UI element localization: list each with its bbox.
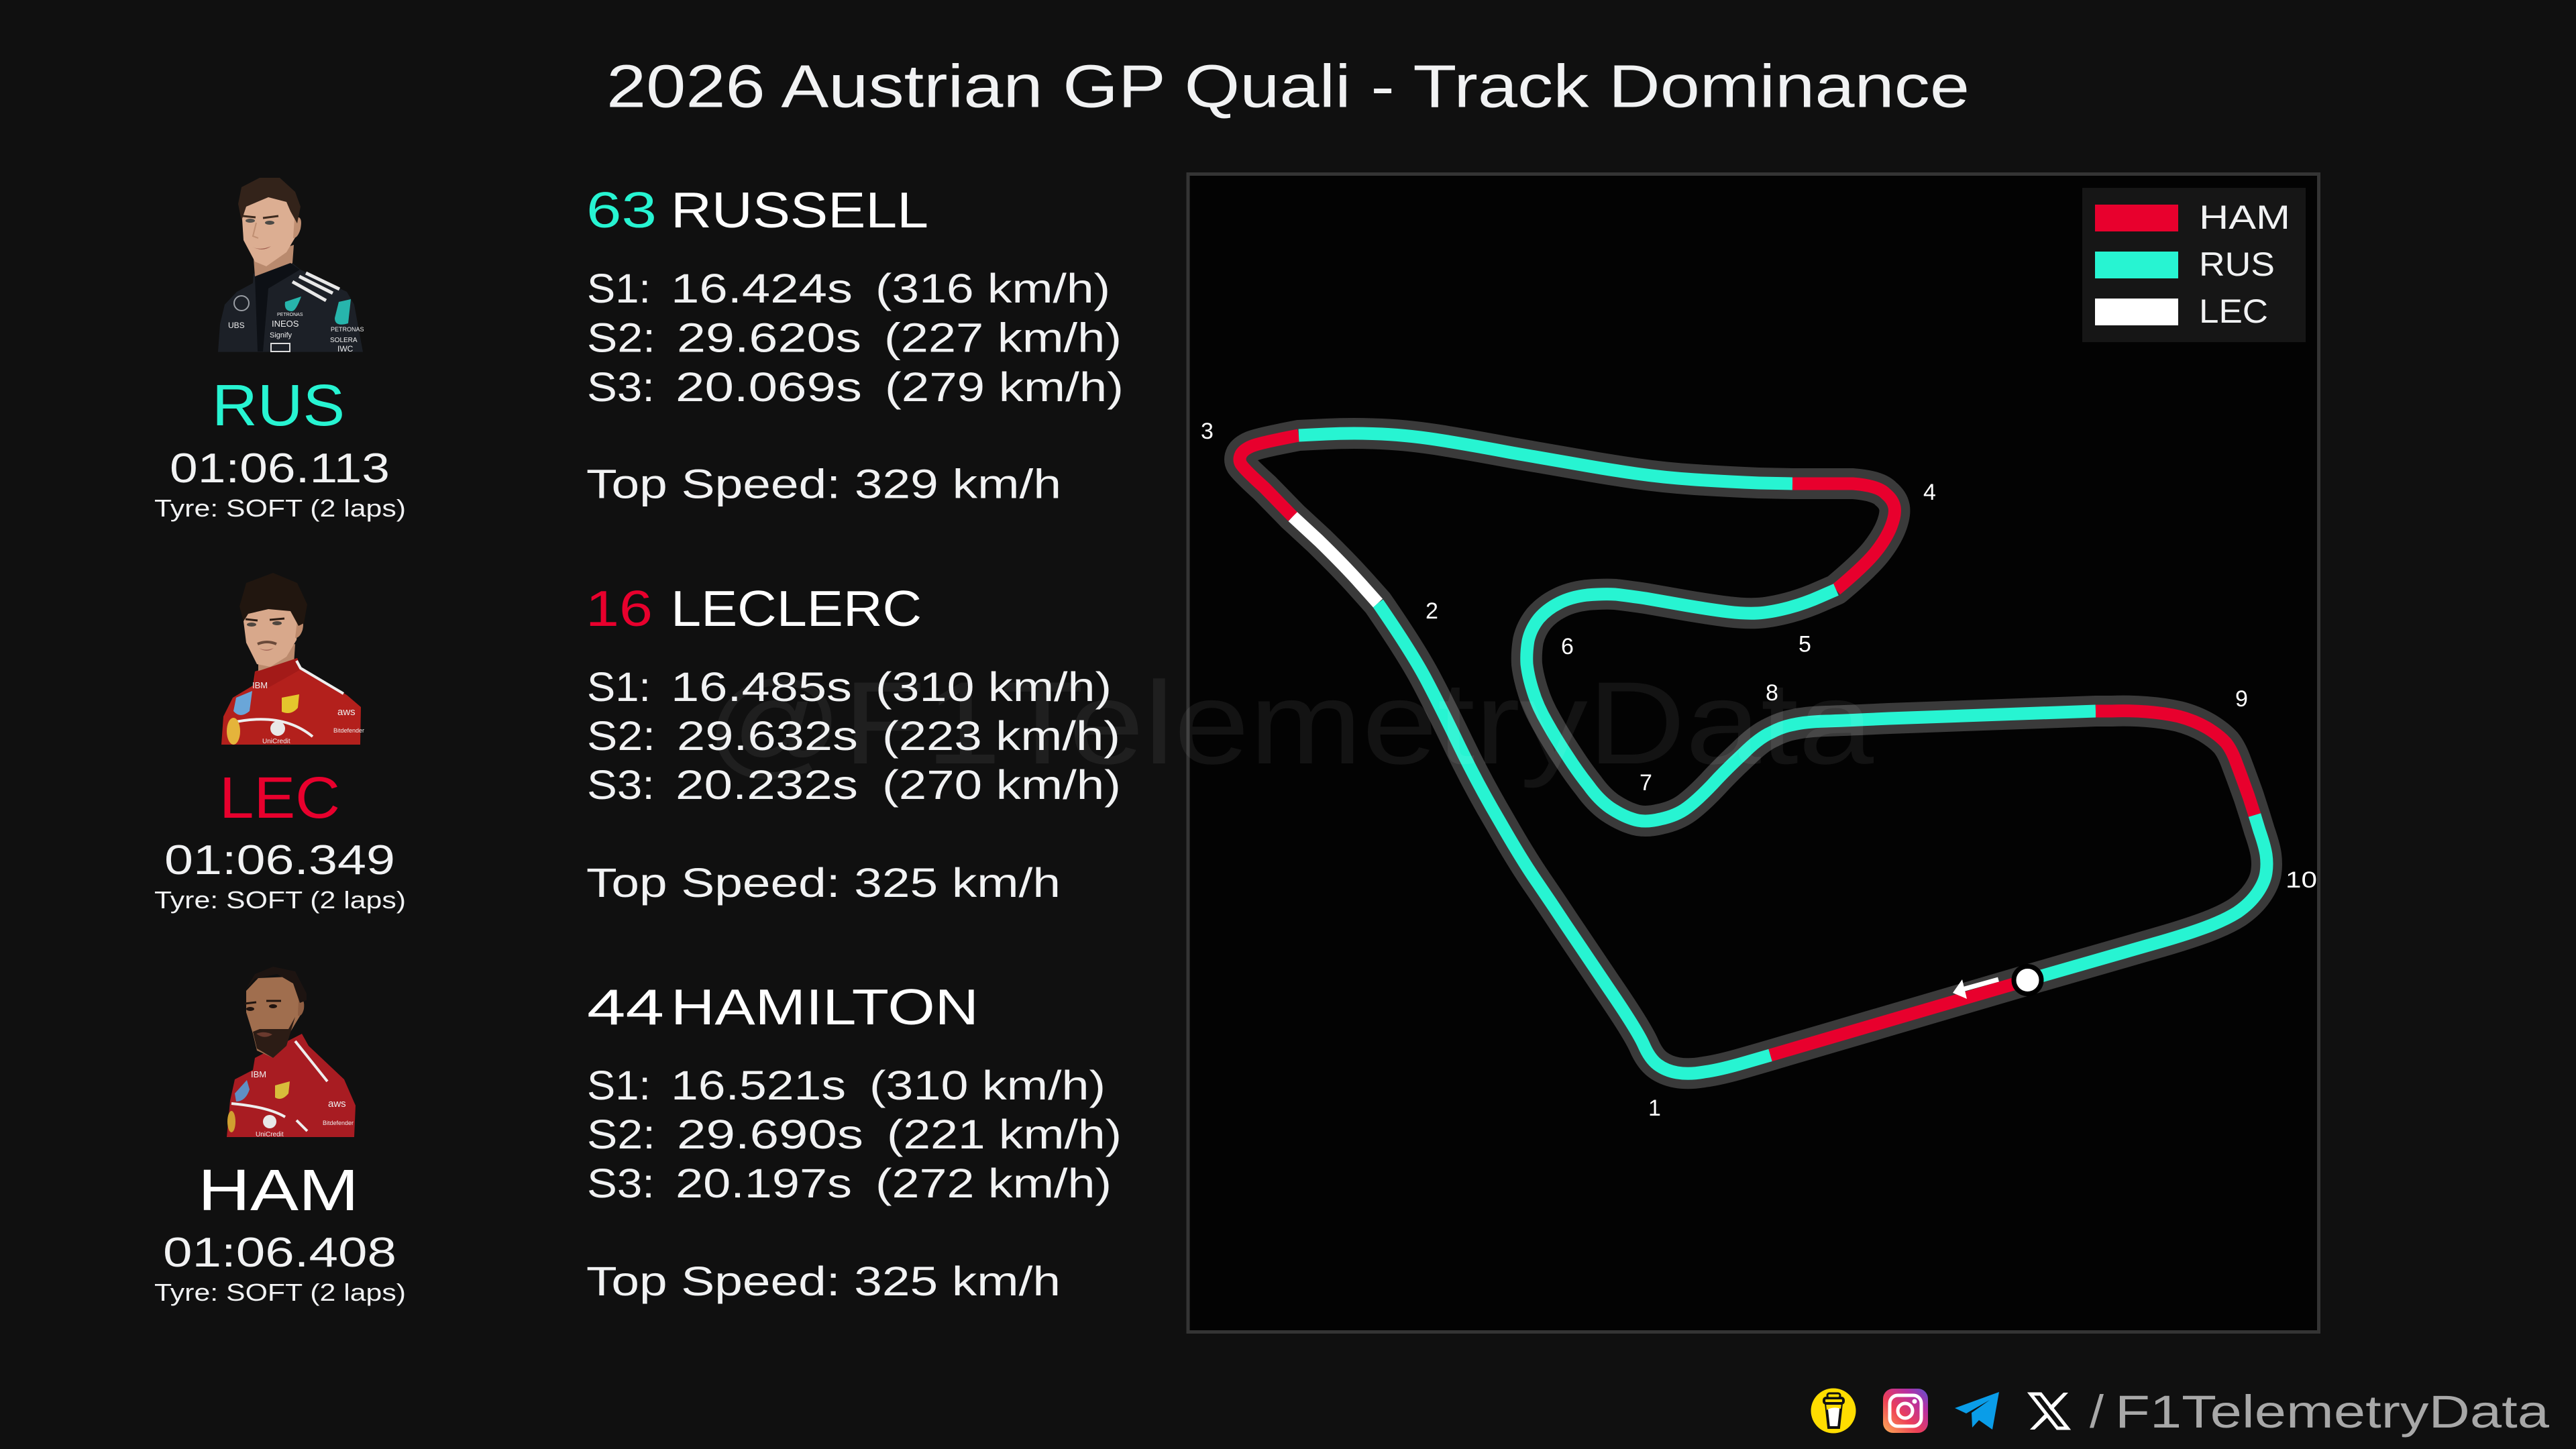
direction arrow: [1953, 979, 1998, 999]
top speed: Top Speed: 325 km/h: [586, 860, 1061, 906]
icon: coffee cup: [1811, 1389, 1856, 1433]
panel: track map: [1188, 174, 2318, 1332]
lap time RUS: 01:06.113: [170, 445, 390, 492]
portrait: Russell: Signify: [270, 331, 292, 339]
sector 1: (316 km/h): [875, 266, 1110, 311]
portrait: Leclerc: UniCredit: [262, 738, 290, 745]
portrait: Russell: IWC: [337, 344, 354, 354]
name Russell: RUSSELL: [671, 182, 928, 238]
panel: Leclerc stats: [586, 580, 1121, 906]
sector 1: [587, 1063, 1106, 1108]
sector 1: S1:: [587, 664, 651, 710]
sector 1: 16.485s: [671, 664, 852, 710]
sector 1: 16.521s: [671, 1063, 846, 1108]
sector 3: S3:: [587, 762, 655, 808]
sector 3: 20.197s: [676, 1161, 852, 1206]
number 63: 63: [586, 182, 657, 238]
sector 1: S1:: [587, 266, 651, 311]
sector 3: 20.069s: [676, 364, 862, 410]
legend swatch RUS: [2095, 252, 2178, 278]
segment: HAM turn 3: [1240, 435, 1299, 517]
segment: RUS turn 10 to line: [2027, 815, 2267, 980]
sector 2: 29.632s: [677, 713, 858, 759]
turn numbers: 7: [1640, 770, 1652, 796]
sector 3: [587, 762, 1121, 808]
track outline: [1240, 433, 2267, 1073]
sector 1: (310 km/h): [875, 664, 1112, 710]
tyre RUS: Tyre: SOFT (2 laps): [154, 494, 406, 522]
turn numbers: [1201, 419, 2317, 1121]
portrait: Leclerc: Bitdefender: [333, 727, 364, 734]
turn numbers: 4: [1923, 480, 1936, 505]
segment: RUS turn 3 to 4: [1299, 433, 1792, 484]
sector 3: (270 km/h): [882, 762, 1121, 808]
portrait: Hamilton: aws: [328, 1098, 346, 1110]
segment: HAM start straight: [1770, 980, 2027, 1055]
segment: HAM turn 4: [1792, 484, 1894, 590]
portrait: Leclerc: IBM: [252, 680, 268, 690]
turn numbers: 3: [1201, 419, 1214, 444]
sector 3: [587, 364, 1124, 410]
icon: telegram: [1955, 1392, 1999, 1430]
sector 2: (227 km/h): [884, 315, 1122, 361]
portrait: Leclerc: aws: [337, 706, 356, 718]
sector 2: S2:: [587, 713, 655, 759]
lap time LEC: 01:06.349: [164, 837, 395, 883]
footer: social handle: [1811, 1386, 2550, 1438]
sector 3: S3:: [587, 364, 655, 410]
segment: RUS turn 1 to turn 2: [1378, 603, 1770, 1073]
tyre HAM: Tyre: SOFT (2 laps): [154, 1279, 406, 1306]
dominance segments: [1240, 433, 2267, 1073]
sector 3: 20.232s: [676, 762, 858, 808]
tyre LEC: Tyre: SOFT (2 laps): [154, 886, 406, 914]
start marker: [2014, 966, 2041, 994]
sector 1: 16.424s: [671, 266, 853, 311]
turn numbers: 1: [1648, 1095, 1661, 1121]
portrait: Russell: PETRONAS: [331, 326, 364, 333]
sector 2: (223 km/h): [882, 713, 1120, 759]
panel: Hamilton stats: [586, 979, 1122, 1304]
panel: driver card LEC: [154, 573, 406, 914]
turn numbers: 2: [1426, 598, 1438, 624]
panel: driver card RUS: [154, 178, 406, 522]
lap time HAM: 01:06.408: [163, 1230, 396, 1276]
legend swatch LEC: [2095, 299, 2178, 325]
turn numbers: 8: [1766, 680, 1778, 706]
legend label LEC: LEC: [2199, 292, 2268, 330]
sector 1: (310 km/h): [869, 1063, 1106, 1108]
portrait: Russell: UBS: [228, 321, 245, 330]
sector 3: [587, 1161, 1112, 1206]
driver code RUS: RUS: [212, 373, 345, 438]
top speed: Top Speed: 325 km/h: [586, 1258, 1061, 1304]
segment: LEC before turn 2: [1293, 517, 1378, 603]
icon: X: [2030, 1393, 2068, 1430]
sector 2: (221 km/h): [887, 1112, 1122, 1157]
portrait: Russell: INEOS: [272, 319, 299, 329]
sector 3: (279 km/h): [885, 364, 1124, 410]
portrait: Leclerc: [221, 573, 364, 745]
sector 2: [587, 713, 1120, 759]
handle text: F1TelemetryData: [2115, 1386, 2550, 1438]
portrait: Russell: [218, 178, 364, 354]
name Leclerc: LECLERC: [671, 580, 922, 637]
watermark: @F1TelemetryData: [706, 658, 1874, 789]
turn numbers: 10: [2286, 867, 2317, 893]
driver code LEC: LEC: [219, 765, 340, 830]
sector 1: [587, 664, 1112, 710]
sector 3: S3:: [587, 1161, 655, 1206]
legend: [2082, 188, 2306, 342]
sector 2: S2:: [587, 1112, 655, 1157]
portrait: Russell: SOLERA: [330, 337, 358, 344]
segment: RUS turn 5 to 8: [1527, 590, 2096, 821]
sector 2: 29.620s: [677, 315, 861, 361]
portrait: Hamilton: [227, 967, 356, 1138]
sector 2: [587, 315, 1122, 361]
panel: Russell stats: [586, 182, 1124, 507]
icon: instagram: [1883, 1389, 1928, 1433]
sector 3: (272 km/h): [875, 1161, 1112, 1206]
handle slash: /: [2090, 1386, 2104, 1438]
number 44: 44: [587, 979, 664, 1035]
turn numbers: 5: [1799, 632, 1811, 657]
portrait: Hamilton: IBM: [251, 1069, 266, 1079]
portrait: Russell: PETRONAS: [277, 313, 303, 317]
sector 1: [587, 266, 1110, 311]
turn numbers: 9: [2235, 686, 2248, 712]
legend label HAM: HAM: [2199, 199, 2290, 236]
sector 2: S2:: [587, 315, 655, 361]
segment: HAM turn 9: [2096, 711, 2255, 815]
number 16: 16: [586, 580, 653, 637]
name Hamilton: HAMILTON: [671, 979, 979, 1035]
map background: [1188, 174, 2318, 1332]
top speed: Top Speed: 329 km/h: [586, 462, 1061, 507]
legend swatch HAM: [2095, 205, 2178, 231]
turn numbers: 6: [1561, 634, 1574, 659]
portrait: Hamilton: Bitdefender: [323, 1120, 354, 1126]
sector 1: S1:: [587, 1063, 651, 1108]
legend label RUS: RUS: [2199, 246, 2275, 283]
panel: driver card HAM: [154, 967, 406, 1306]
sector 2: [587, 1112, 1122, 1157]
title: 2026 Austrian GP Quali - Track Dominance: [606, 54, 1970, 121]
portrait: Hamilton: UniCredit: [256, 1131, 284, 1138]
driver code HAM: HAM: [198, 1158, 359, 1223]
sector 2: 29.690s: [677, 1112, 863, 1157]
